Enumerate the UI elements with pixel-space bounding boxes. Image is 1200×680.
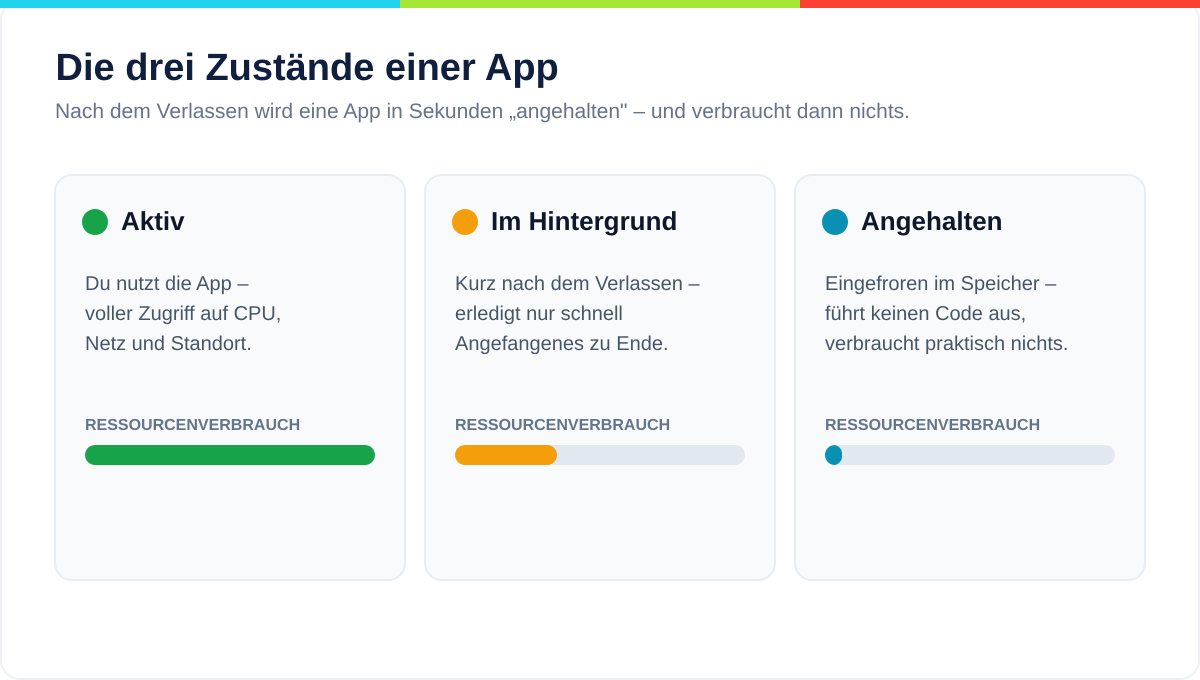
top colour bar [0,0,1200,8]
bar: resource usage 100% [85,445,375,465]
heading: Angehalten: Angehalten [861,206,1003,236]
heading: Aktiv: Aktiv [121,206,185,236]
description: Aktiv: Du nutzt die App – [85,273,248,295]
title: Die drei Zustände einer App [56,47,559,89]
icon: teal status dot [822,209,848,235]
label: Ressourcenverbrauch: RESSOURCENVERBRAUCH [455,417,670,434]
description: Im Hintergrund: Angefangenes zu Ende. [455,333,669,355]
description: Aktiv: Netz und Standort. [85,333,252,355]
label: Ressourcenverbrauch: RESSOURCENVERBRAUCH [85,417,300,434]
panel: Aktiv [54,174,406,581]
description: Angehalten: führt keinen Code aus, [825,303,1026,325]
panel: Angehalten [794,174,1146,581]
label: Ressourcenverbrauch: RESSOURCENVERBRAUCH [825,417,1040,434]
description: Im Hintergrund: erledigt nur schnell [455,303,623,325]
subtitle: Nach dem Verlassen wird eine App in Sekunden „angehalten" – und verbraucht dann nichts. [55,100,910,123]
description: Aktiv: voller Zugriff auf CPU, [85,303,281,325]
description: Angehalten: Eingefroren im Speicher – [825,273,1056,295]
description: Angehalten [825,273,1068,355]
description: Im Hintergrund [455,273,700,355]
description: Aktiv [85,273,281,355]
icon: orange status dot [452,209,478,235]
panel: Im Hintergrund [424,174,776,581]
description: Im Hintergrund: Kurz nach dem Verlassen – [455,273,700,295]
bar: resource usage 35% [455,445,745,465]
icon: green status dot [82,209,108,235]
heading: Im Hintergrund: Im Hintergrund [491,206,677,236]
bar: resource usage 6% [825,445,1115,465]
description: Angehalten: verbraucht praktisch nichts. [825,333,1068,355]
